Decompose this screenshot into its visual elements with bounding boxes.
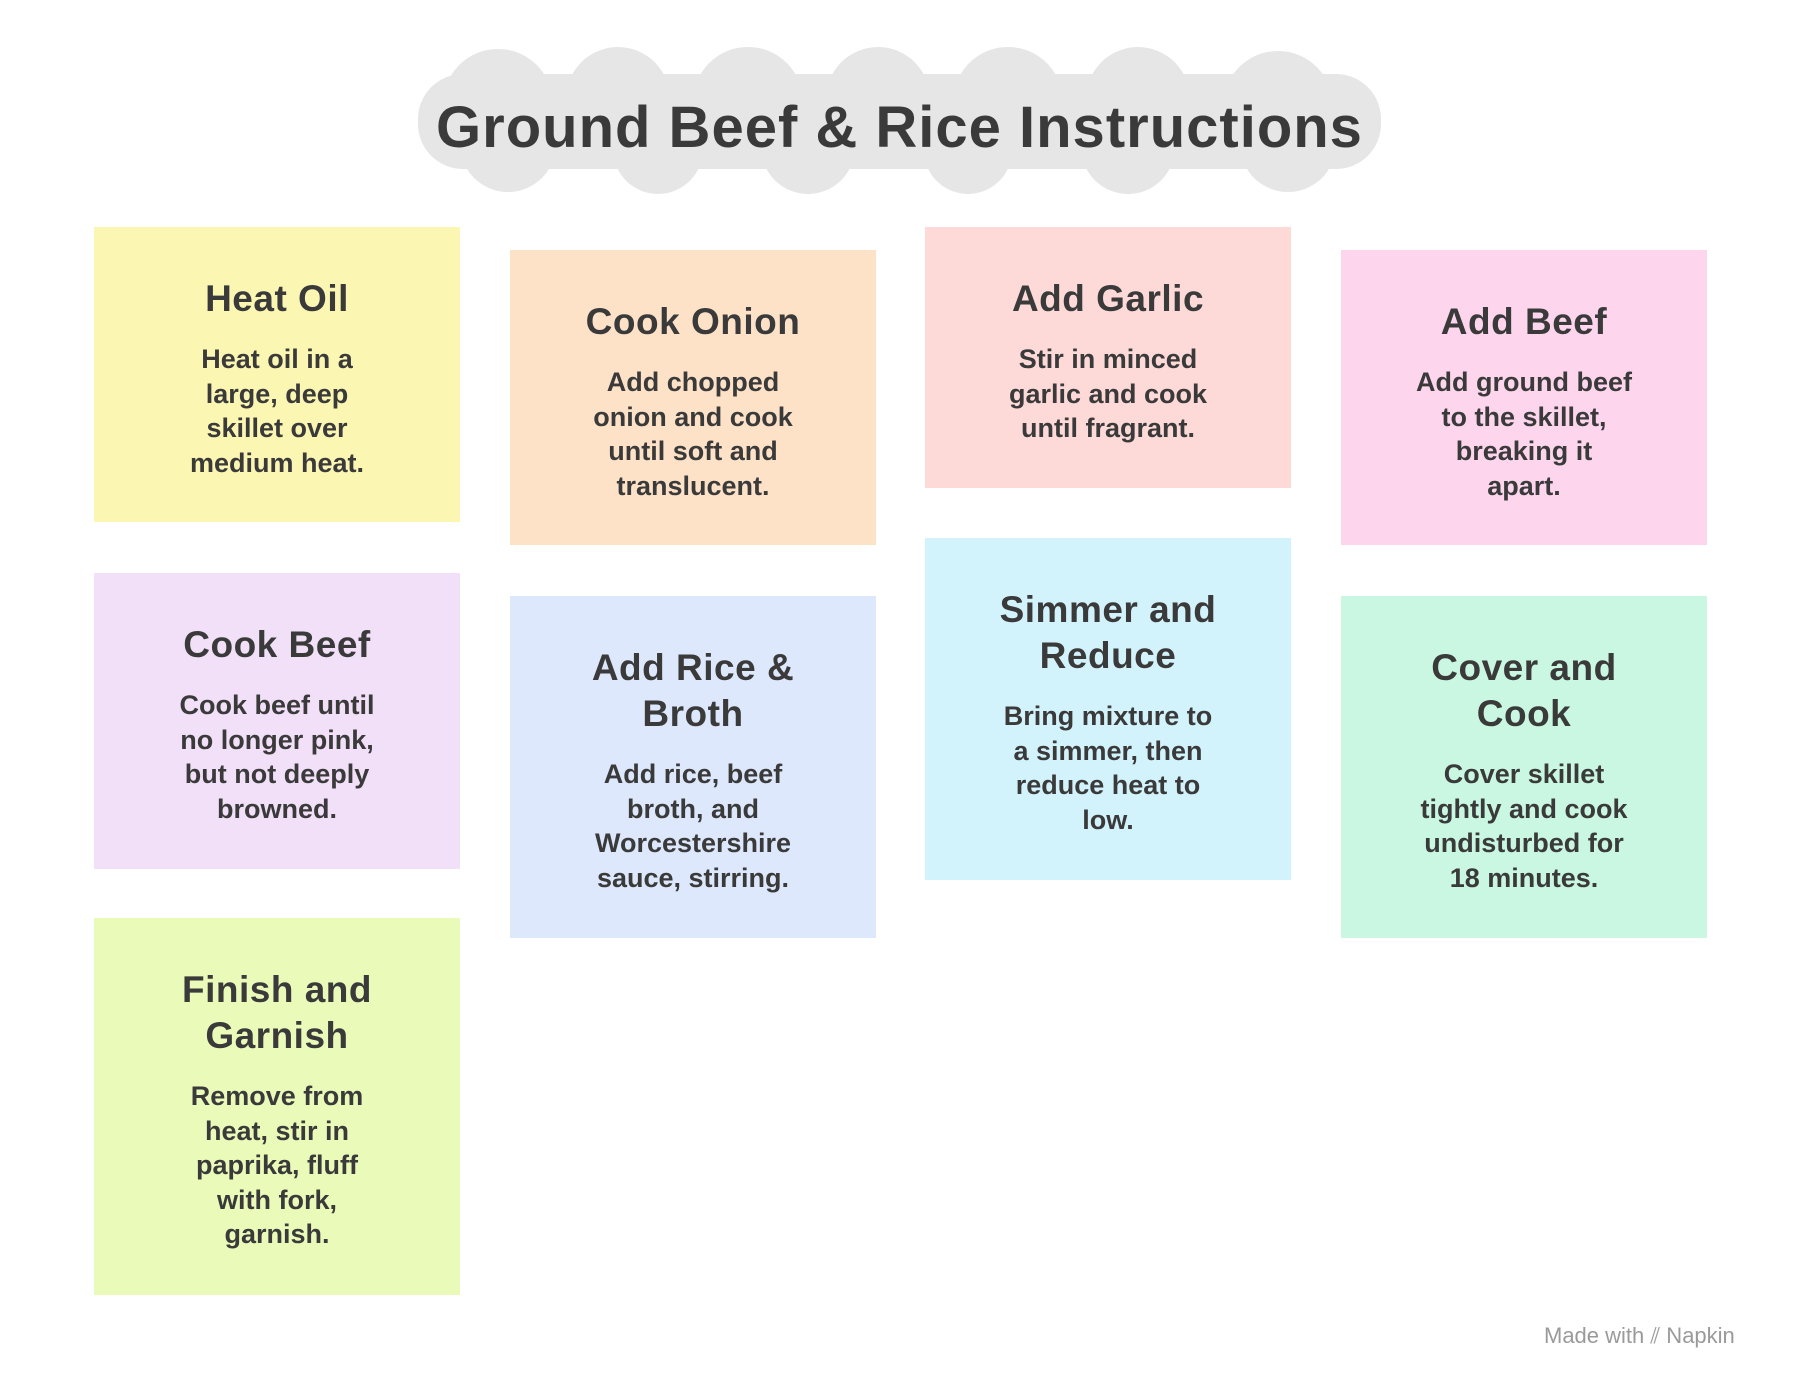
card: Simmer and Reduce	[925, 538, 1291, 880]
card: Cover and Cook: Cover skillet	[1444, 759, 1604, 789]
card: Cook Onion: translucent.	[616, 470, 770, 500]
title: Ground Beef & Rice Instructions	[436, 95, 1363, 160]
card: Add Beef: Add ground beef	[1416, 367, 1632, 397]
card: Finish and Garnish: Remove from	[191, 1081, 363, 1111]
card: Cook Beef: browned.	[217, 794, 337, 824]
title cloud	[418, 47, 1381, 194]
card: Cook Onion: until soft and	[608, 436, 778, 466]
card: Heat Oil: skillet over	[206, 413, 348, 443]
card: Simmer and Reduce: a simmer, then	[1013, 736, 1203, 766]
card: Add Rice & Broth: Add rice, beef	[604, 759, 782, 789]
card: Cover and Cook: Cook	[1477, 693, 1571, 734]
card: Finish and Garnish: Garnish	[205, 1015, 349, 1056]
card: Heat Oil	[94, 227, 460, 522]
card: Simmer and Reduce: low.	[1082, 804, 1134, 834]
card: Simmer and Reduce: Bring mixture to	[1004, 701, 1212, 731]
card: Cook Beef: Cook Beef	[183, 624, 371, 665]
card: Cook Beef: Cook beef until	[180, 690, 374, 720]
card: Cook Onion	[510, 250, 876, 545]
card: Add Beef: apart.	[1487, 470, 1561, 500]
card: Finish and Garnish: with fork,	[217, 1184, 337, 1214]
card: Add Rice & Broth: sauce, stirring.	[597, 862, 789, 892]
card: Cook Onion: Cook Onion	[586, 301, 800, 342]
card: Heat Oil: Heat Oil	[205, 278, 349, 319]
card: Cover and Cook: undisturbed for	[1424, 828, 1624, 858]
card: Cook Onion: onion and cook	[593, 402, 793, 432]
card: Heat Oil: medium heat.	[190, 448, 364, 478]
card: Add Rice & Broth: Worcestershire	[595, 828, 791, 858]
card: Add Rice & Broth	[510, 596, 876, 938]
card: Finish and Garnish: Finish and	[182, 969, 372, 1010]
card: Add Garlic	[925, 227, 1291, 488]
card: Add Garlic: Add Garlic	[1012, 278, 1204, 319]
card: Finish and Garnish: heat, stir in	[205, 1116, 349, 1146]
card: Cover and Cook: Cover and	[1431, 647, 1617, 688]
card: Cover and Cook	[1341, 596, 1707, 938]
card: Add Garlic: until fragrant.	[1021, 413, 1195, 443]
card: Add Rice & Broth: Add Rice &	[592, 647, 794, 688]
card: Add Beef: breaking it	[1456, 436, 1592, 466]
card: Cook Beef: no longer pink,	[180, 724, 374, 754]
card: Cover and Cook: 18 minutes.	[1450, 862, 1598, 892]
card: Simmer and Reduce: reduce heat to	[1016, 770, 1200, 800]
card: Add Rice & Broth: Broth	[642, 693, 744, 734]
card: Add Beef: Add Beef	[1441, 301, 1607, 342]
card: Cook Onion: Add chopped	[607, 367, 779, 397]
card: Simmer and Reduce: Reduce	[1040, 635, 1176, 676]
card: Cook Beef: but not deeply	[185, 759, 369, 789]
card: Finish and Garnish: garnish.	[224, 1219, 330, 1249]
card: Add Beef	[1341, 250, 1707, 545]
card: Finish and Garnish: paprika, fluff	[196, 1150, 358, 1180]
card: Add Rice & Broth: broth, and	[627, 794, 759, 824]
card: Heat Oil: Heat oil in a	[201, 344, 353, 374]
card: Add Garlic: Stir in minced	[1019, 344, 1197, 374]
card: Finish and Garnish	[94, 918, 460, 1295]
card: Cover and Cook: tightly and cook	[1420, 794, 1628, 824]
card: Add Garlic: garlic and cook	[1009, 378, 1207, 408]
card: Simmer and Reduce: Simmer and	[1000, 589, 1216, 630]
watermark: Made with ⫽ Napkin	[1544, 1323, 1735, 1348]
card: Cook Beef	[94, 573, 460, 869]
card: Heat Oil: large, deep	[206, 378, 348, 408]
card: Add Beef: to the skillet,	[1441, 402, 1607, 432]
